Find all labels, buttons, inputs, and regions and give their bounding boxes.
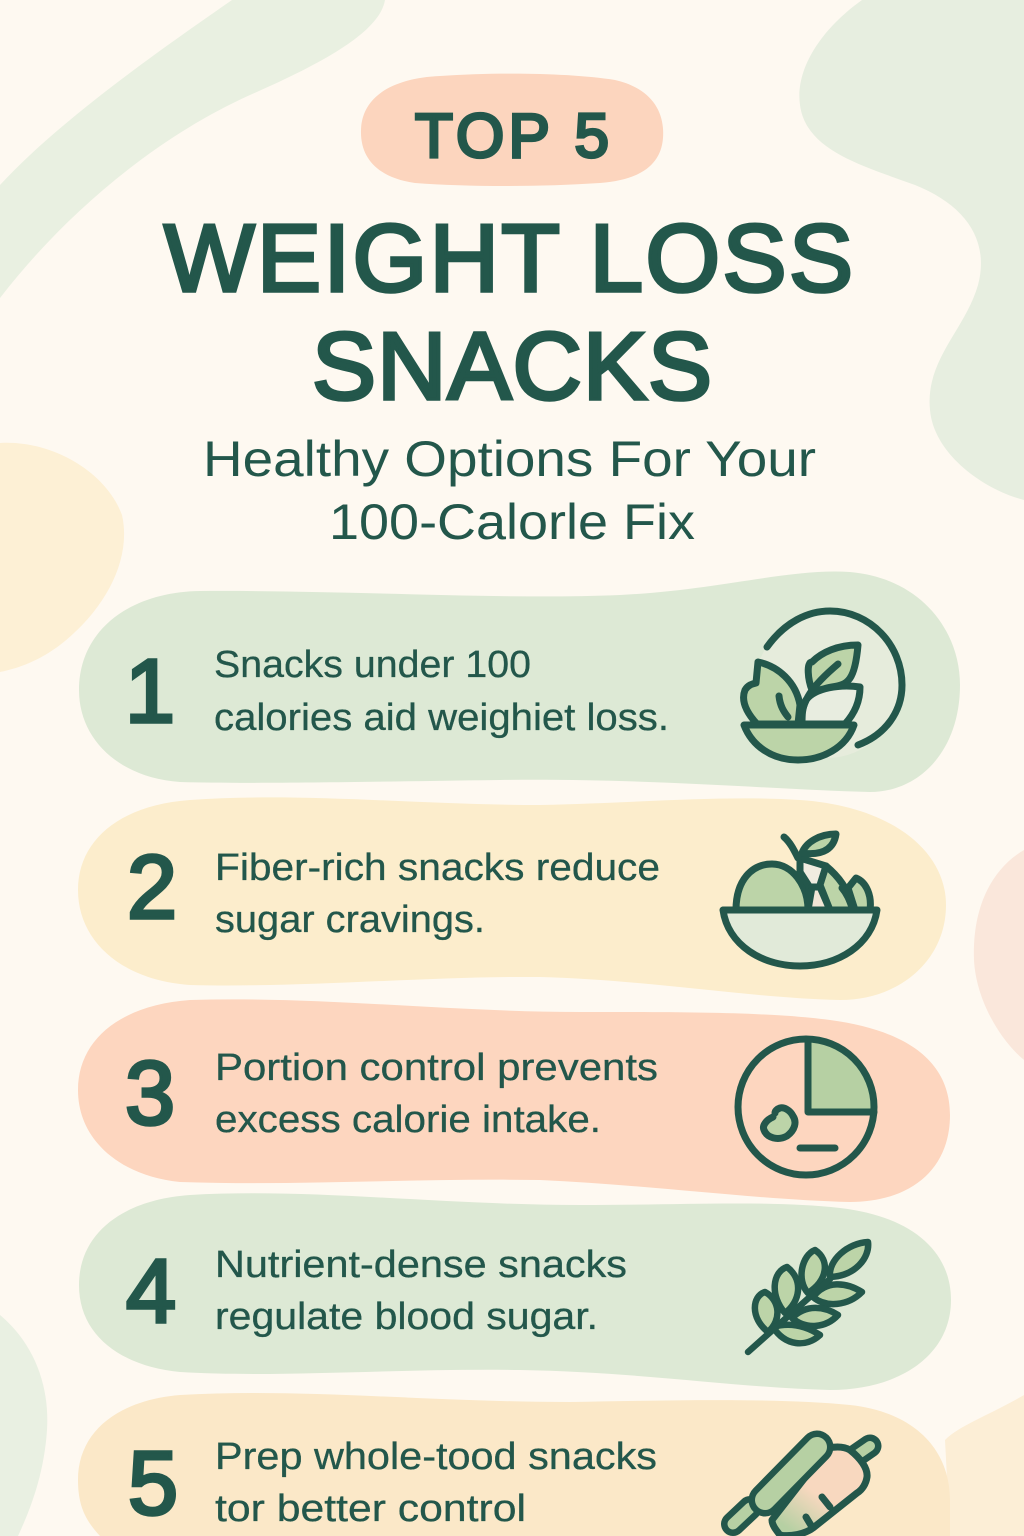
number 1: 1	[125, 642, 175, 742]
badge: top 5	[361, 74, 663, 186]
title	[164, 205, 853, 420]
number 3: 3	[125, 1044, 175, 1144]
text 1: Snacks under 100	[214, 644, 531, 686]
text 2: sugar cravings.	[215, 899, 485, 941]
panel: item 1	[79, 572, 960, 792]
title: SNACKS	[312, 313, 712, 420]
subtitle	[203, 431, 816, 550]
text 1	[214, 644, 669, 739]
text 3: excess calorie intake.	[215, 1099, 601, 1141]
icon: wheat sprig	[748, 1242, 868, 1352]
text 5: Prep whole-tood snacks	[215, 1436, 657, 1478]
subtitle: 100-Calorle Fix	[329, 494, 695, 550]
panel: item 4	[79, 1193, 951, 1390]
number 2: 2	[127, 838, 177, 938]
text 4	[215, 1244, 627, 1338]
text 5	[215, 1436, 657, 1530]
icon: portion plate	[738, 1039, 874, 1175]
title: WEIGHT LOSS	[164, 205, 853, 312]
icon: fruit bowl	[723, 834, 877, 966]
panel: item 2	[78, 797, 946, 1000]
icon: rolling pin	[733, 1446, 870, 1536]
text 4: regulate blood sugar.	[215, 1296, 598, 1338]
text 4: Nutrient-dense snacks	[215, 1244, 627, 1286]
number 5: 5	[128, 1434, 178, 1534]
subtitle: Healthy Options For Your	[203, 431, 816, 487]
panel: item 3	[78, 999, 950, 1202]
text 2: Fiber-rich snacks reduce	[215, 847, 660, 889]
text 5: tor better control	[215, 1488, 526, 1530]
panel: item 5	[78, 1393, 950, 1536]
text 3: Portion control prevents	[215, 1047, 658, 1089]
number 4: 4	[126, 1242, 176, 1342]
badge: top 5: TOP 5	[415, 102, 609, 171]
text 1: calories aid weighiet loss.	[214, 697, 669, 739]
text 3	[215, 1047, 658, 1141]
text 2	[215, 847, 660, 941]
icon: salad leaves in bowl	[744, 611, 902, 760]
